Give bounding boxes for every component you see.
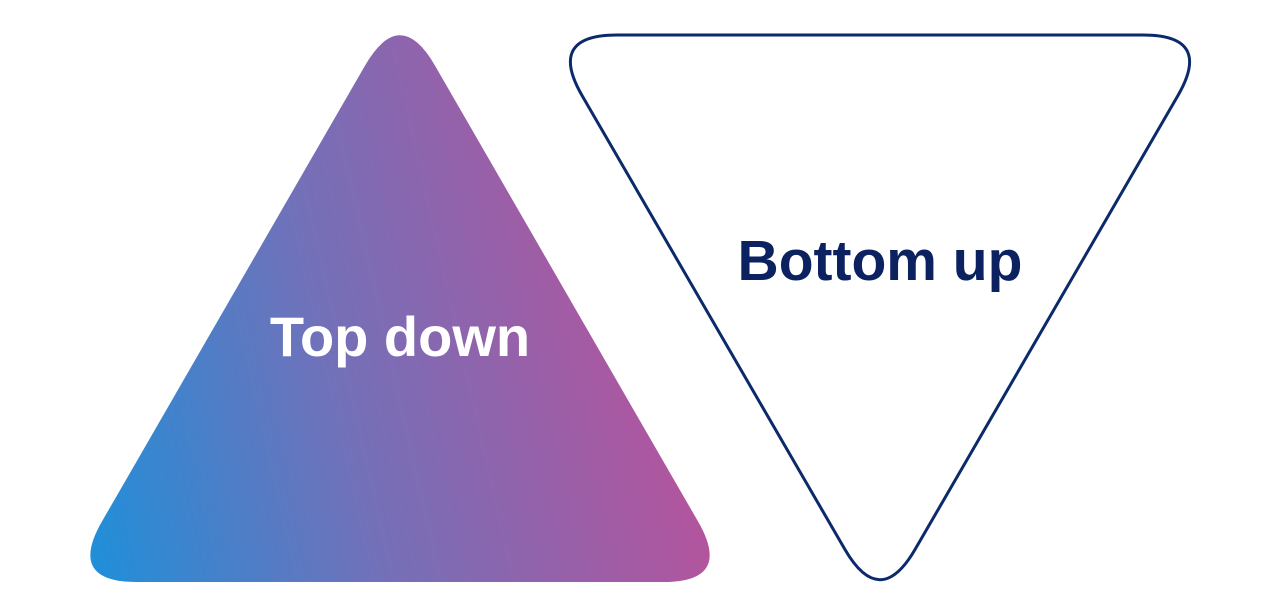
heading: bottom up: Bottom up: [738, 229, 1022, 293]
heading: top down: Top down: [270, 305, 530, 368]
